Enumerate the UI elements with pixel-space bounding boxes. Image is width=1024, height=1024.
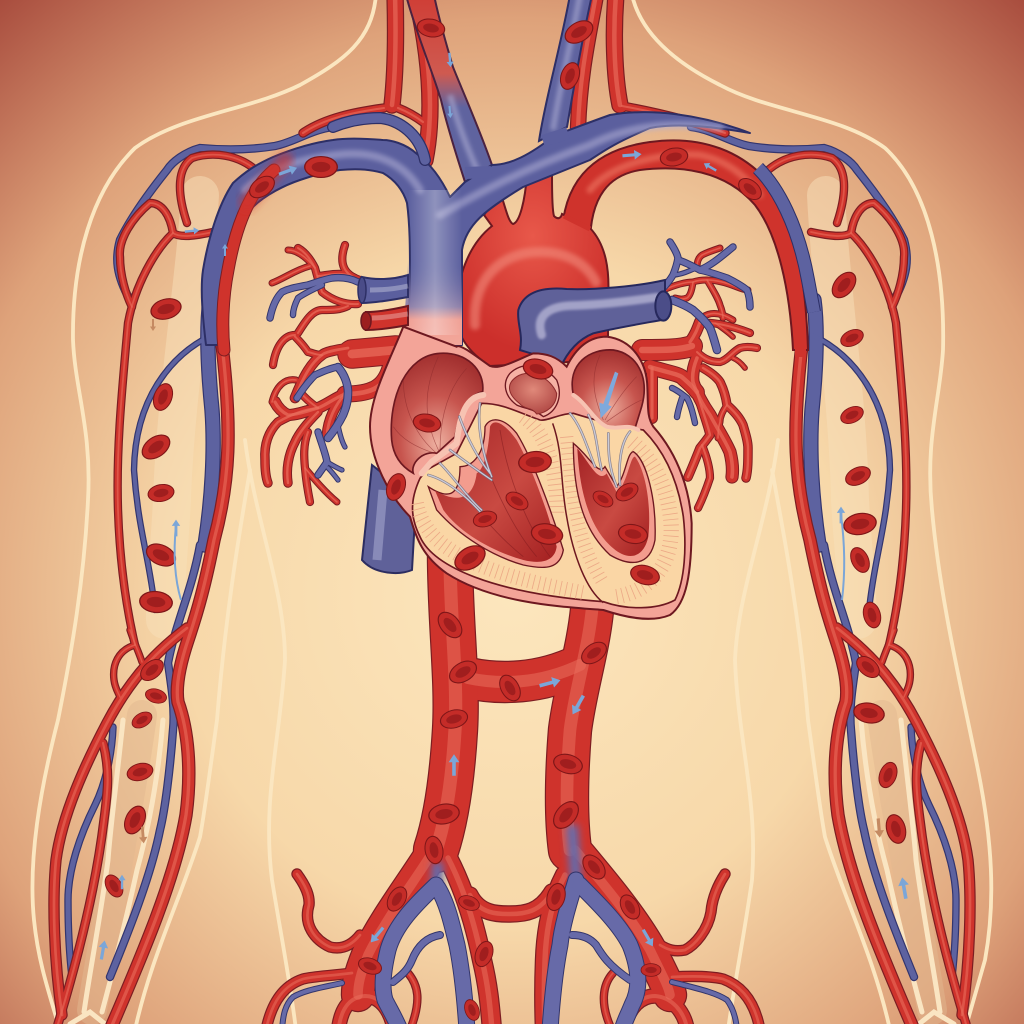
lung vessel tree <box>265 242 757 508</box>
right atrium <box>391 353 483 473</box>
left ventricle cavity <box>428 420 563 567</box>
arm bones <box>70 195 954 1024</box>
lower body vessels <box>266 555 760 1024</box>
pulmonary side vessels <box>358 275 408 330</box>
right shoulder artery <box>562 140 814 357</box>
red blood cells <box>101 15 909 1023</box>
pulmonary artery <box>518 280 671 368</box>
right ventricle cavity <box>573 443 655 562</box>
arrow in left atrium <box>599 372 618 418</box>
heart <box>370 280 692 619</box>
blood flow arrows <box>97 53 911 960</box>
myocardium <box>412 403 685 608</box>
neck arteries <box>303 0 725 160</box>
outer wall <box>370 327 692 619</box>
jugular veins <box>406 0 592 182</box>
aortic root <box>505 365 559 417</box>
left atrium <box>572 350 644 428</box>
inferior vena cava <box>362 465 416 573</box>
left shoulder artery strip <box>223 160 285 350</box>
right arm vessels <box>691 127 970 1024</box>
left arm vessels <box>54 127 333 1024</box>
aorta and branches <box>457 175 608 366</box>
left shoulder vein and superior vena cava <box>202 112 750 345</box>
heart valves and chordae <box>422 395 638 512</box>
left shoulder thin vein <box>333 118 425 160</box>
